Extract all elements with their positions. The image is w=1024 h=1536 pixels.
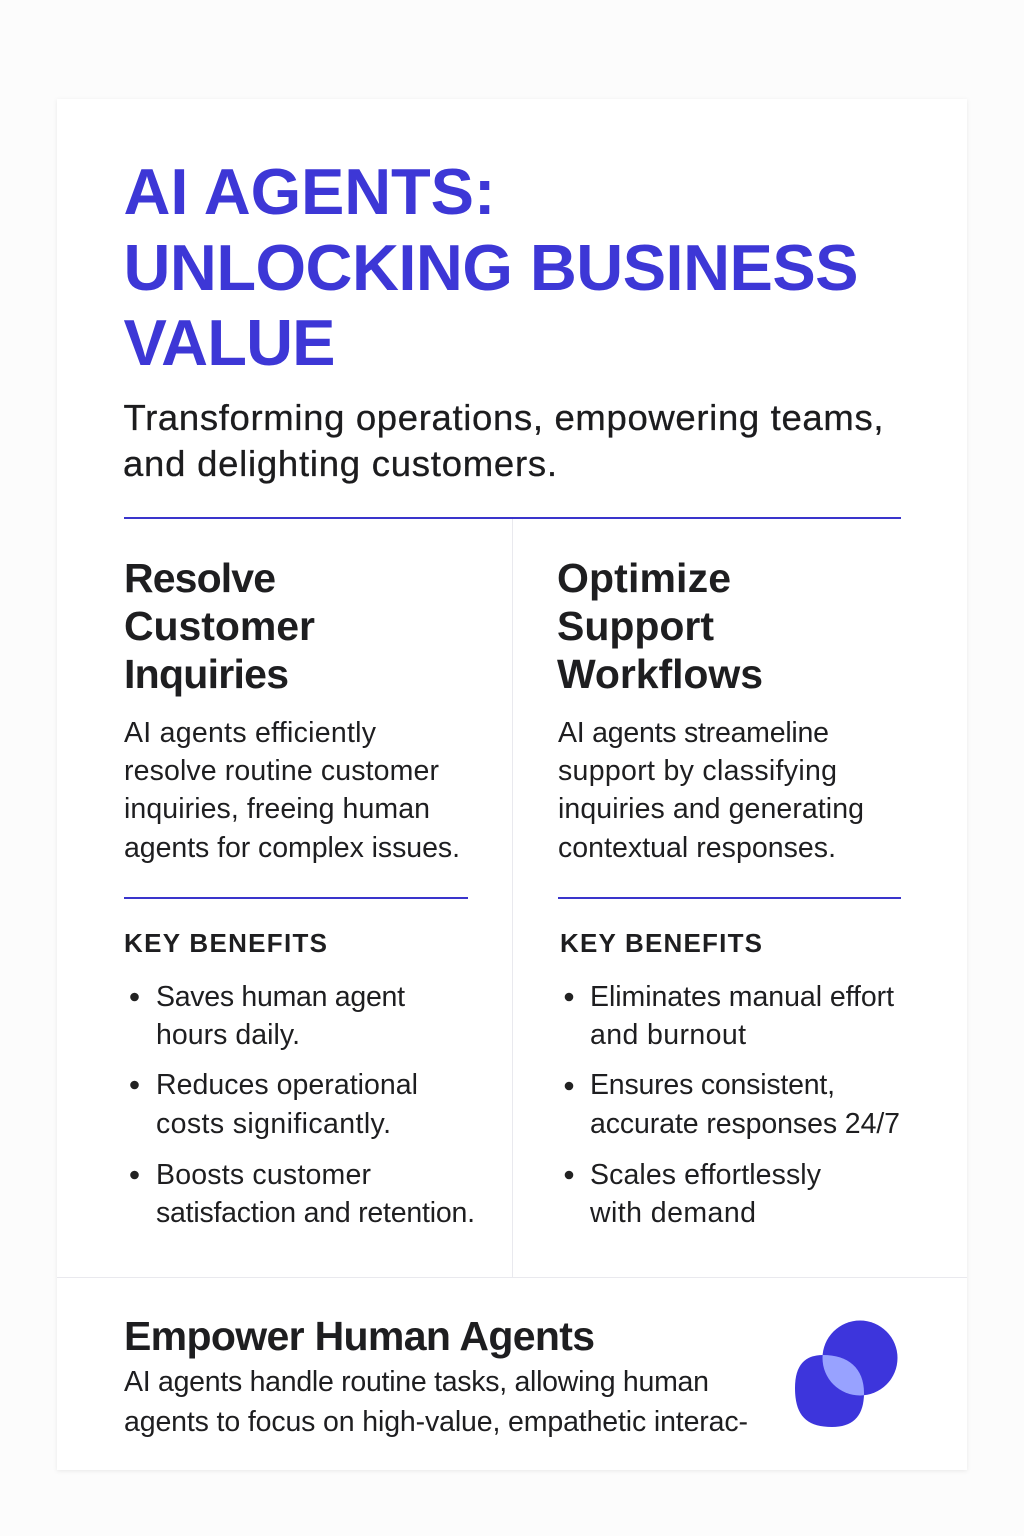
- heading: optimize support workflows: Optimize: [557, 555, 731, 601]
- heading: optimize support workflows: Workflows: [557, 651, 763, 697]
- list: right benefits: and burnout: [590, 1019, 746, 1051]
- text: optimize description: AI agents streameline: [558, 717, 829, 749]
- text: resolve description: agents for complex issues.: [124, 832, 460, 864]
- title: AI AGENTS:: [124, 155, 496, 228]
- list: right benefits: Scales effortlessly: [590, 1159, 822, 1191]
- text: optimize description: inquiries and generating: [558, 793, 864, 825]
- heading: resolve customer inquiries: [124, 555, 315, 697]
- title: [124, 155, 858, 379]
- panel: empower human agents: [124, 1313, 898, 1438]
- list: left benefits: hours daily.: [156, 1019, 300, 1051]
- list: left benefits: Reduces operational: [156, 1069, 418, 1101]
- text: empower description: [124, 1366, 748, 1438]
- list: right benefits: Eliminates manual effort: [590, 981, 894, 1013]
- heading: resolve customer inquiries: Resolve: [124, 555, 276, 601]
- heading: optimize support workflows: Support: [557, 603, 714, 649]
- subtitle: [123, 397, 884, 484]
- heading: key benefits right: KEY BENEFITS: [560, 928, 762, 958]
- text: empower description: agents to focus on high-value, empathetic interac-: [124, 1406, 748, 1438]
- list: left benefits: satisfaction and retention.: [156, 1197, 475, 1229]
- list: left benefits: costs significantly.: [156, 1108, 391, 1140]
- heading: empower human agents: Empower Human Agents: [124, 1313, 595, 1359]
- heading: key benefits left: KEY BENEFITS: [124, 928, 327, 958]
- heading: resolve customer inquiries: Customer: [124, 603, 315, 649]
- panel: main card: [57, 99, 967, 1470]
- list: right benefits: [565, 981, 900, 1229]
- icon: overlapping shapes: [795, 1320, 898, 1427]
- text: optimize description: support by classifying: [558, 755, 837, 787]
- list: left benefits: [130, 981, 475, 1229]
- subtitle: and delighting customers.: [123, 443, 557, 484]
- list: left benefits: Saves human agent: [156, 981, 405, 1013]
- subtitle: Transforming operations, empowering teams,: [124, 397, 884, 438]
- list: left benefits: Boosts customer: [156, 1159, 372, 1191]
- list: right benefits: Ensures consistent,: [590, 1069, 835, 1101]
- panel: resolve customer inquiries: [124, 555, 475, 1229]
- text: resolve description: [124, 717, 460, 864]
- text: optimize description: [558, 717, 864, 864]
- heading: resolve customer inquiries: Inquiries: [124, 651, 289, 697]
- text: resolve description: resolve routine customer: [124, 755, 440, 787]
- list: right benefits: accurate responses 24/7: [590, 1108, 900, 1140]
- title: VALUE: [124, 306, 336, 379]
- text: resolve description: AI agents efficiently: [124, 717, 377, 749]
- text: empower description: AI agents handle routine tasks, allowing human: [124, 1366, 709, 1398]
- list: right benefits: with demand: [589, 1197, 756, 1229]
- text: resolve description: inquiries, freeing human: [124, 793, 430, 825]
- panel: optimize support workflows: [557, 555, 901, 1229]
- title: UNLOCKING BUSINESS: [124, 231, 858, 304]
- text: optimize description: contextual responses.: [558, 832, 836, 864]
- heading: optimize support workflows: [557, 555, 763, 697]
